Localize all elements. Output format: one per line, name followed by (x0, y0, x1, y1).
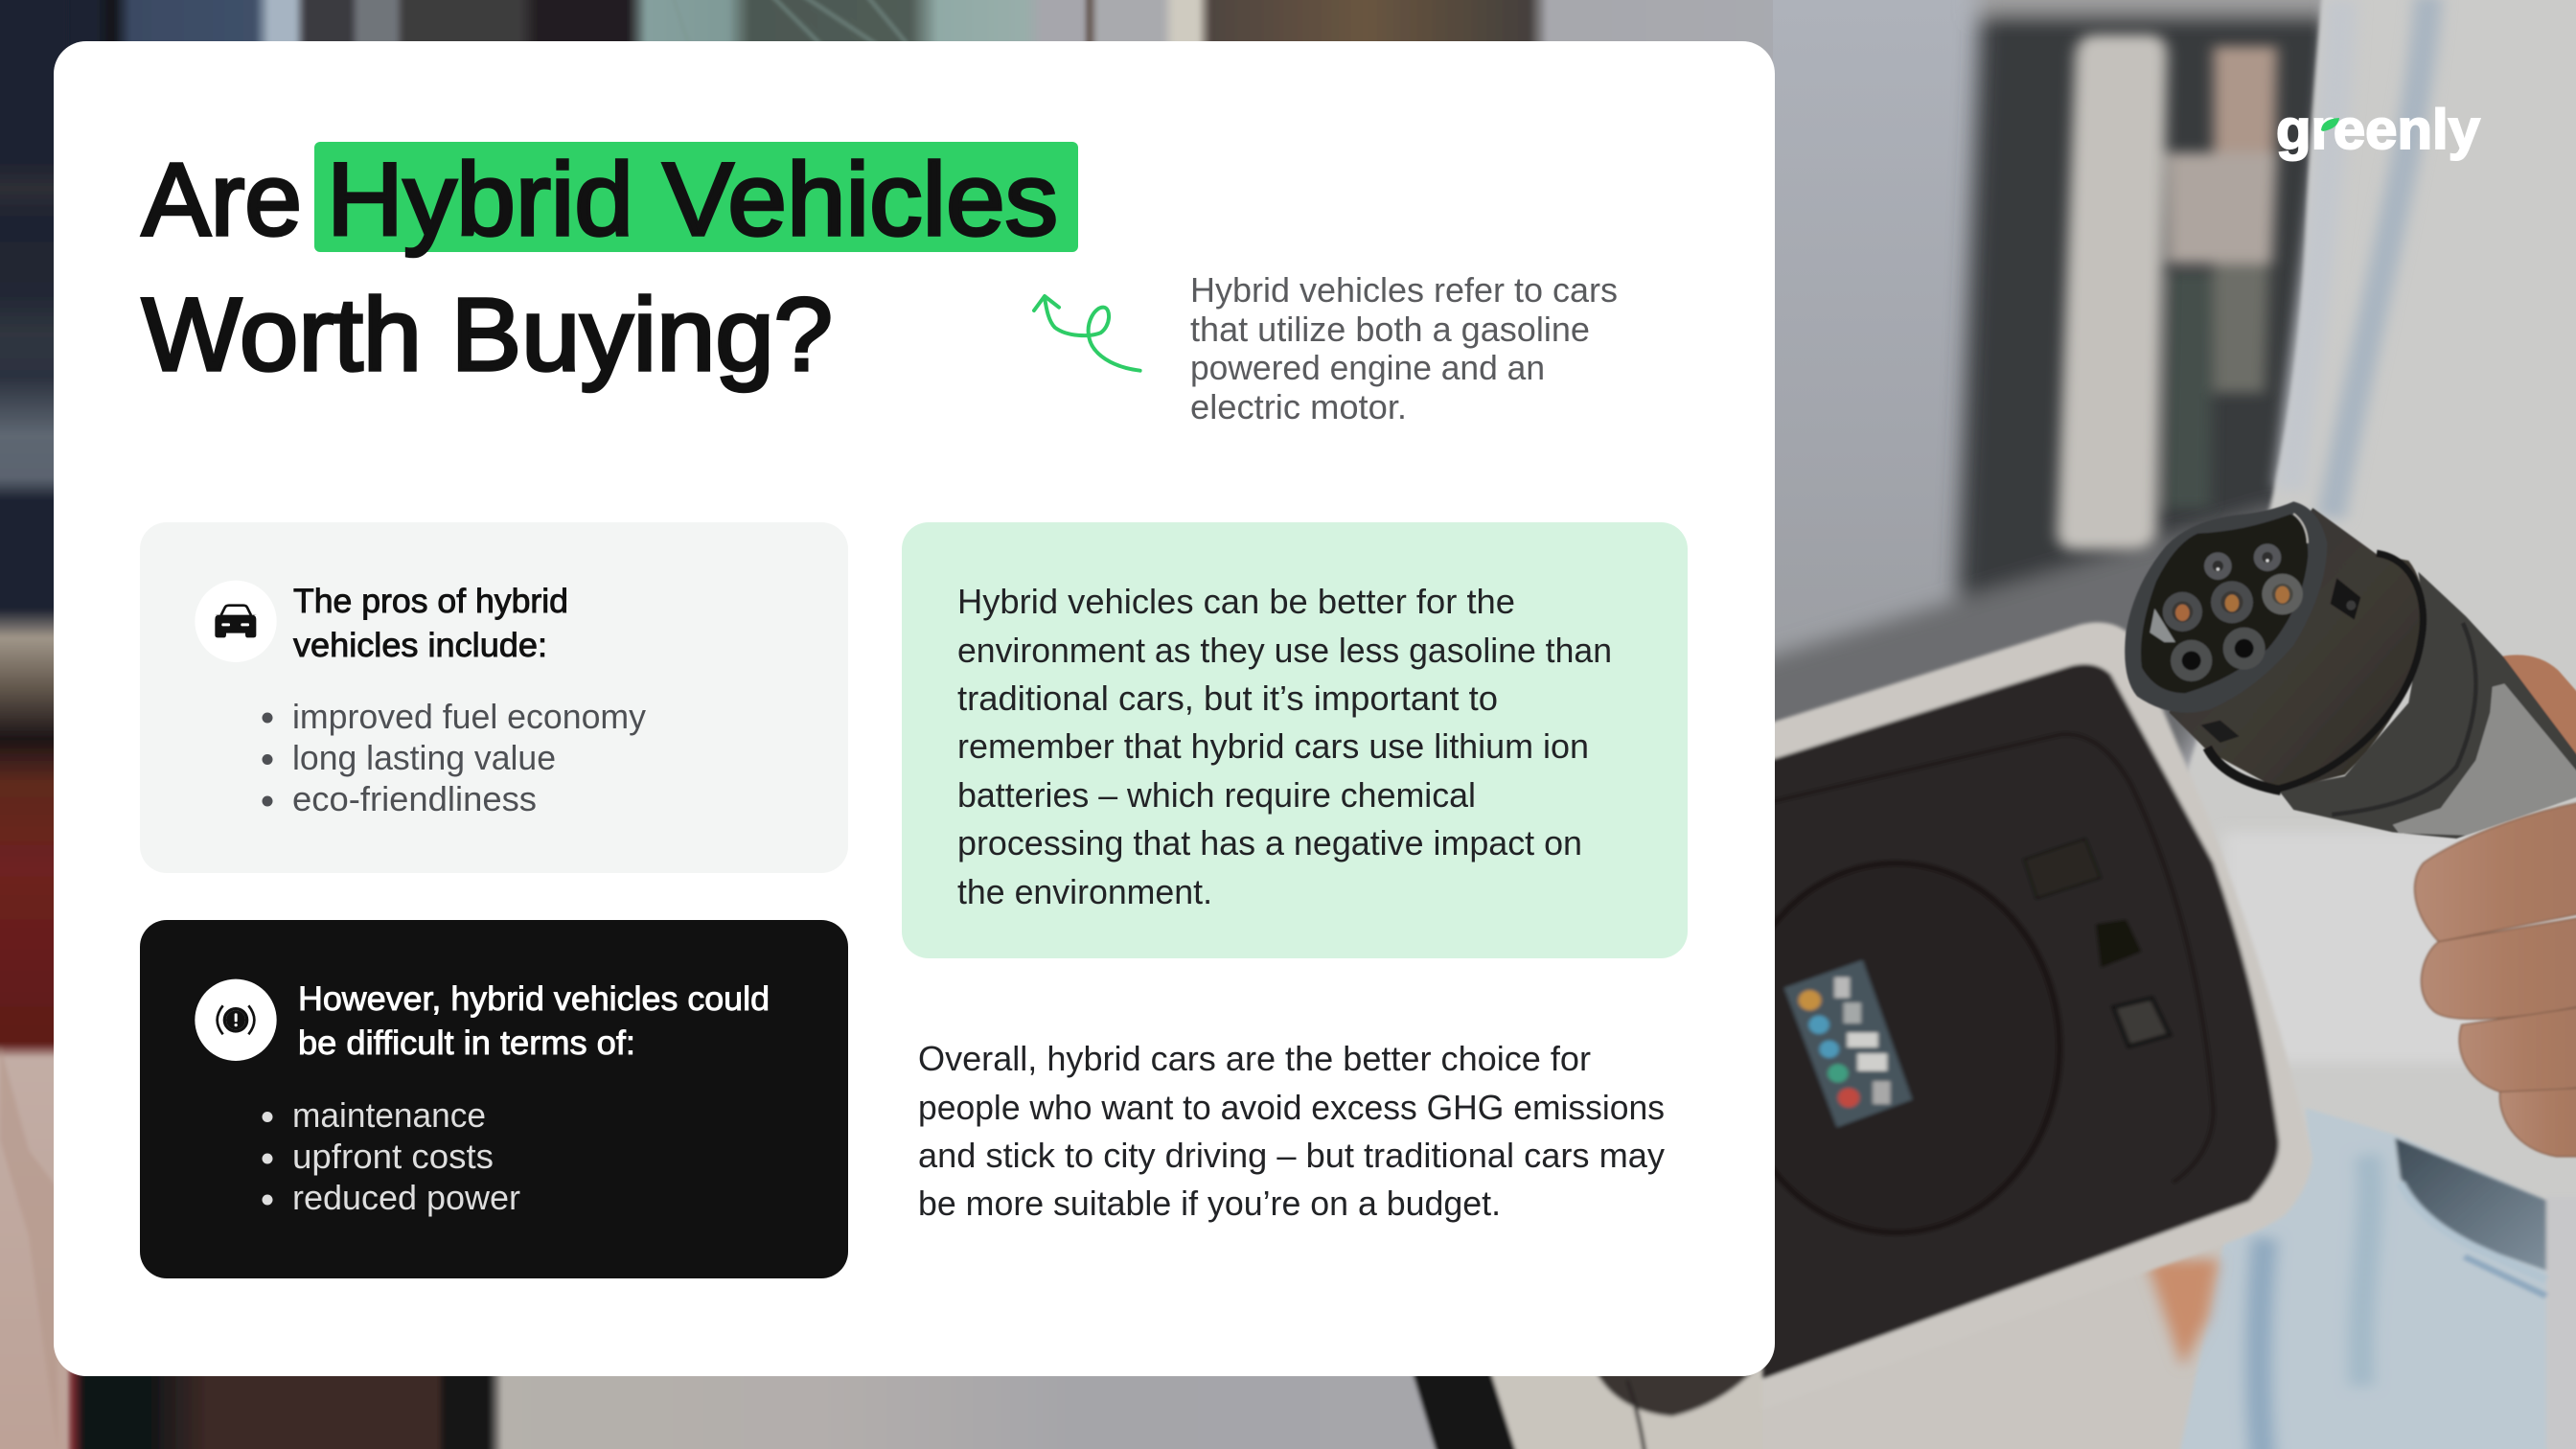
intro description: electric motor. (1190, 387, 1407, 426)
wall (1773, 0, 1988, 739)
cons heading (298, 980, 770, 1062)
environmental note text: Hybrid vehicles can be better for the (957, 582, 1515, 621)
environmental note text: the environment. (957, 872, 1212, 911)
pros heading: The pros of hybrid (293, 583, 568, 620)
lower left backdrop (1762, 1233, 2234, 1449)
photo: hand (2415, 798, 2576, 1157)
environmental note text: processing that has a negative impact on (957, 823, 1582, 862)
intro description: Hybrid vehicles refer to cars (1190, 270, 1618, 310)
title highlight: Hybrid Vehicles (327, 141, 1058, 257)
conclusion text (918, 1039, 1665, 1223)
icon: brake warning (195, 979, 277, 1061)
environmental note text: remember that hybrid cars use lithium ion (957, 726, 1589, 766)
panel: pros (140, 522, 848, 873)
photo: right side scene (1732, 0, 2576, 1449)
conclusion text: Overall, hybrid cars are the better choice for (918, 1039, 1591, 1078)
cons heading: However, hybrid vehicles could (298, 980, 770, 1018)
cons list: upfront costs (292, 1137, 494, 1176)
plug notches (2331, 578, 2360, 620)
main white card (54, 41, 1775, 1376)
cons list: maintenance (292, 1095, 486, 1135)
cons list (263, 1095, 520, 1217)
photo: bottom strip (0, 1361, 1821, 1449)
panel: cons (140, 920, 848, 1278)
environmental note text: environment as they use less gasoline than (957, 631, 1612, 670)
intro description: that utilize both a gasoline (1190, 310, 1590, 349)
charger housing (1732, 622, 2312, 1409)
pros list: eco-friendliness (292, 779, 537, 818)
cons heading: be difficult in terms of: (298, 1024, 635, 1062)
shirt (2162, 0, 2576, 1449)
plug collar (2169, 508, 2424, 791)
plug rim (2125, 501, 2327, 713)
title (142, 141, 1078, 392)
pros list: improved fuel economy (292, 697, 646, 736)
photo: left strip (0, 0, 67, 1449)
logo: greenly: greenly (2276, 99, 2480, 161)
skin behind housing (2147, 1259, 2219, 1368)
icon: car (195, 581, 277, 662)
logo leaf (2321, 118, 2339, 131)
pros list: long lasting value (292, 738, 556, 777)
pros list (263, 697, 646, 818)
status sticker (1784, 960, 1912, 1127)
housing latches (2096, 919, 2170, 1046)
intro description (1190, 270, 1618, 426)
pros heading (293, 583, 568, 664)
cons list: reduced power (292, 1178, 520, 1217)
title: Are (142, 141, 302, 257)
plug handle (2278, 572, 2576, 839)
finger behind plug (2501, 655, 2576, 767)
environmental note text: traditional cars, but it’s important to (957, 678, 1498, 718)
intro description: powered engine and an (1190, 348, 1545, 387)
conclusion text: people who want to avoid excess GHG emissions (918, 1088, 1665, 1127)
photo: charging plug (2125, 501, 2576, 839)
environmental note text (957, 582, 1612, 911)
conclusion text: and stick to city driving – but traditional cars may (918, 1136, 1665, 1175)
panel: environmental note (902, 522, 1688, 958)
icon: curly arrow (1034, 296, 1140, 371)
plug pins (2163, 543, 2303, 681)
jeans (2173, 1108, 2576, 1449)
conclusion text: be more suitable if you’re on a budget. (918, 1184, 1501, 1223)
photo: top strip (0, 0, 1821, 58)
title: Worth Buying? (142, 276, 833, 392)
pros heading: vehicles include: (293, 627, 547, 664)
environmental note text: batteries – which require chemical (957, 775, 1476, 815)
